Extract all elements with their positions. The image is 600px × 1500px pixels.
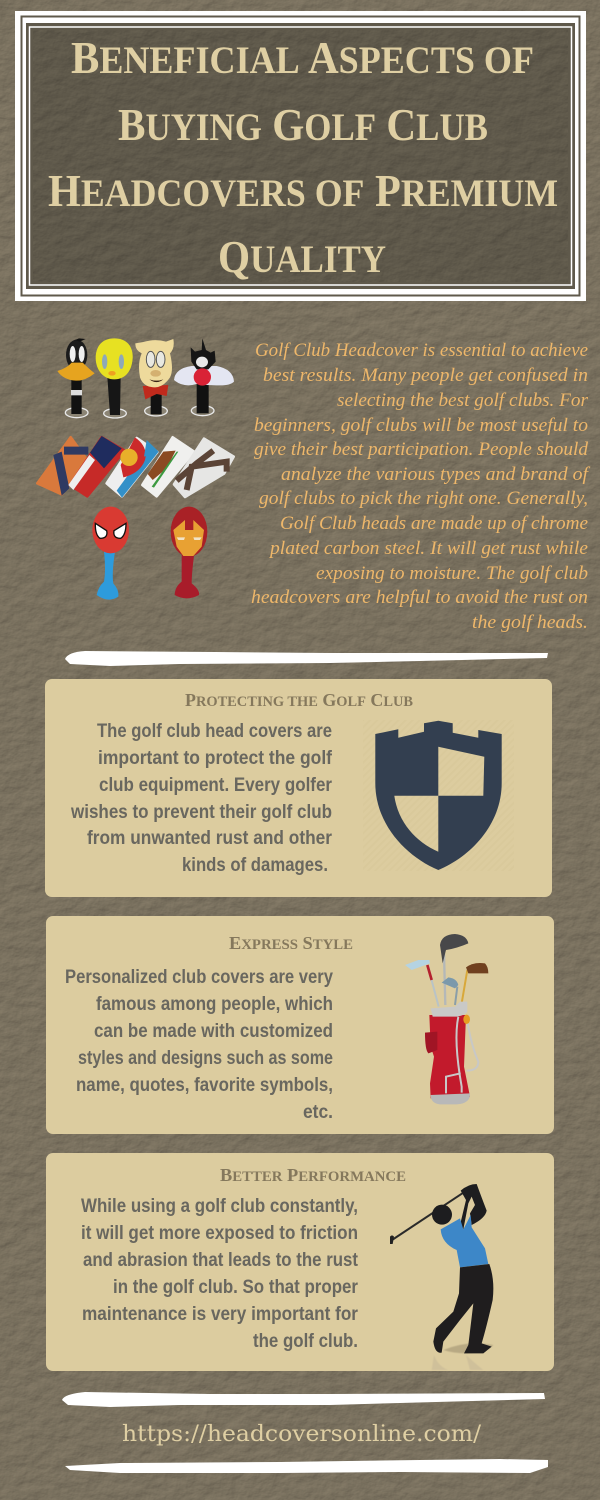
icon: flag putter covers bbox=[37, 436, 234, 498]
icon: duck headcover bbox=[57, 338, 95, 418]
panel: express style bbox=[46, 916, 554, 1134]
icon: spider headcover bbox=[92, 507, 129, 600]
intro paragraph: give their best participation. People should bbox=[254, 439, 589, 460]
text block bbox=[70, 720, 332, 876]
title: BUYING GOLF CLUB bbox=[118, 99, 488, 150]
intro paragraph: beginners, golf clubs will be most useful to bbox=[254, 415, 588, 436]
panel: better performance bbox=[46, 1153, 554, 1371]
intro paragraph: Golf Club heads are made up of chrome bbox=[280, 513, 588, 534]
text block: the golf club. bbox=[253, 1330, 358, 1352]
text block: wishes to prevent their golf club bbox=[70, 801, 332, 823]
icon: yellow bird headcover bbox=[96, 338, 133, 418]
intro paragraph: the golf heads. bbox=[472, 612, 588, 633]
intro paragraph: exposing to moisture. The golf club bbox=[316, 563, 588, 584]
intro paragraph: Golf Club Headcover is essential to achieve bbox=[255, 340, 588, 361]
icon: golf bag with clubs bbox=[405, 934, 488, 1104]
intro paragraph: plated carbon steel. It will get rust while bbox=[268, 538, 588, 559]
title: BENEFICIAL ASPECTS OF bbox=[71, 32, 534, 83]
text block: can be made with customized bbox=[94, 1020, 333, 1042]
title: QUALITY bbox=[218, 231, 386, 282]
title bbox=[48, 32, 558, 282]
title: HEADCOVERS OF PREMIUM bbox=[48, 165, 558, 216]
brush stroke divider bbox=[65, 1459, 548, 1473]
text block: important to protect the golf bbox=[98, 747, 332, 769]
website url: https://headcoversonline.com/ bbox=[122, 1422, 482, 1447]
heading: PROTECTING THE GOLF CLUB bbox=[185, 690, 413, 710]
icon: cat headcover bbox=[174, 338, 234, 416]
panel: protecting the golf club bbox=[45, 679, 552, 897]
icon: golfer silhouette bbox=[390, 1184, 493, 1370]
heading: EXPRESS STYLE bbox=[229, 933, 353, 953]
text block: maintenance is very important for bbox=[82, 1303, 358, 1325]
header frame with title bbox=[15, 11, 586, 301]
intro paragraph: selecting the best golf clubs. For bbox=[337, 390, 589, 411]
headcover product photos bbox=[37, 338, 234, 600]
icon: pig headcover bbox=[135, 339, 174, 416]
text block: famous among people, which bbox=[96, 993, 333, 1015]
text block: Personalized club covers are very bbox=[65, 966, 333, 988]
text block: and abrasion that leads to the rust bbox=[83, 1249, 358, 1271]
intro paragraph: golf clubs to pick the right one. Generally, bbox=[259, 488, 588, 509]
text block: kinds of damages. bbox=[182, 854, 328, 876]
text block: styles and designs such as some bbox=[78, 1047, 333, 1069]
text block bbox=[65, 966, 333, 1123]
text block bbox=[81, 1195, 358, 1352]
intro paragraph: best results. Many people get confused in bbox=[263, 365, 588, 386]
text block: club equipment. Every golfer bbox=[99, 774, 332, 796]
text block: The golf club head covers are bbox=[97, 720, 332, 742]
text block: it will get more exposed to friction bbox=[81, 1222, 358, 1244]
brush stroke divider bbox=[62, 1392, 545, 1407]
intro paragraph: headcovers are helpful to avoid the rust on bbox=[251, 587, 588, 608]
text block: While using a golf club constantly, bbox=[81, 1195, 358, 1217]
text block: from unwanted rust and other bbox=[87, 827, 332, 849]
heading: BETTER PERFORMANCE bbox=[220, 1165, 406, 1185]
text block: in the golf club. So that proper bbox=[113, 1276, 358, 1298]
icon: shield bbox=[363, 720, 514, 871]
text block: etc. bbox=[303, 1101, 333, 1123]
intro paragraph bbox=[251, 340, 591, 633]
icon: iron headcover bbox=[171, 507, 207, 598]
text block: name, quotes, favorite symbols, bbox=[76, 1074, 333, 1096]
brush stroke divider bbox=[65, 651, 548, 666]
intro paragraph: analyze the various types and brand of bbox=[281, 464, 591, 485]
